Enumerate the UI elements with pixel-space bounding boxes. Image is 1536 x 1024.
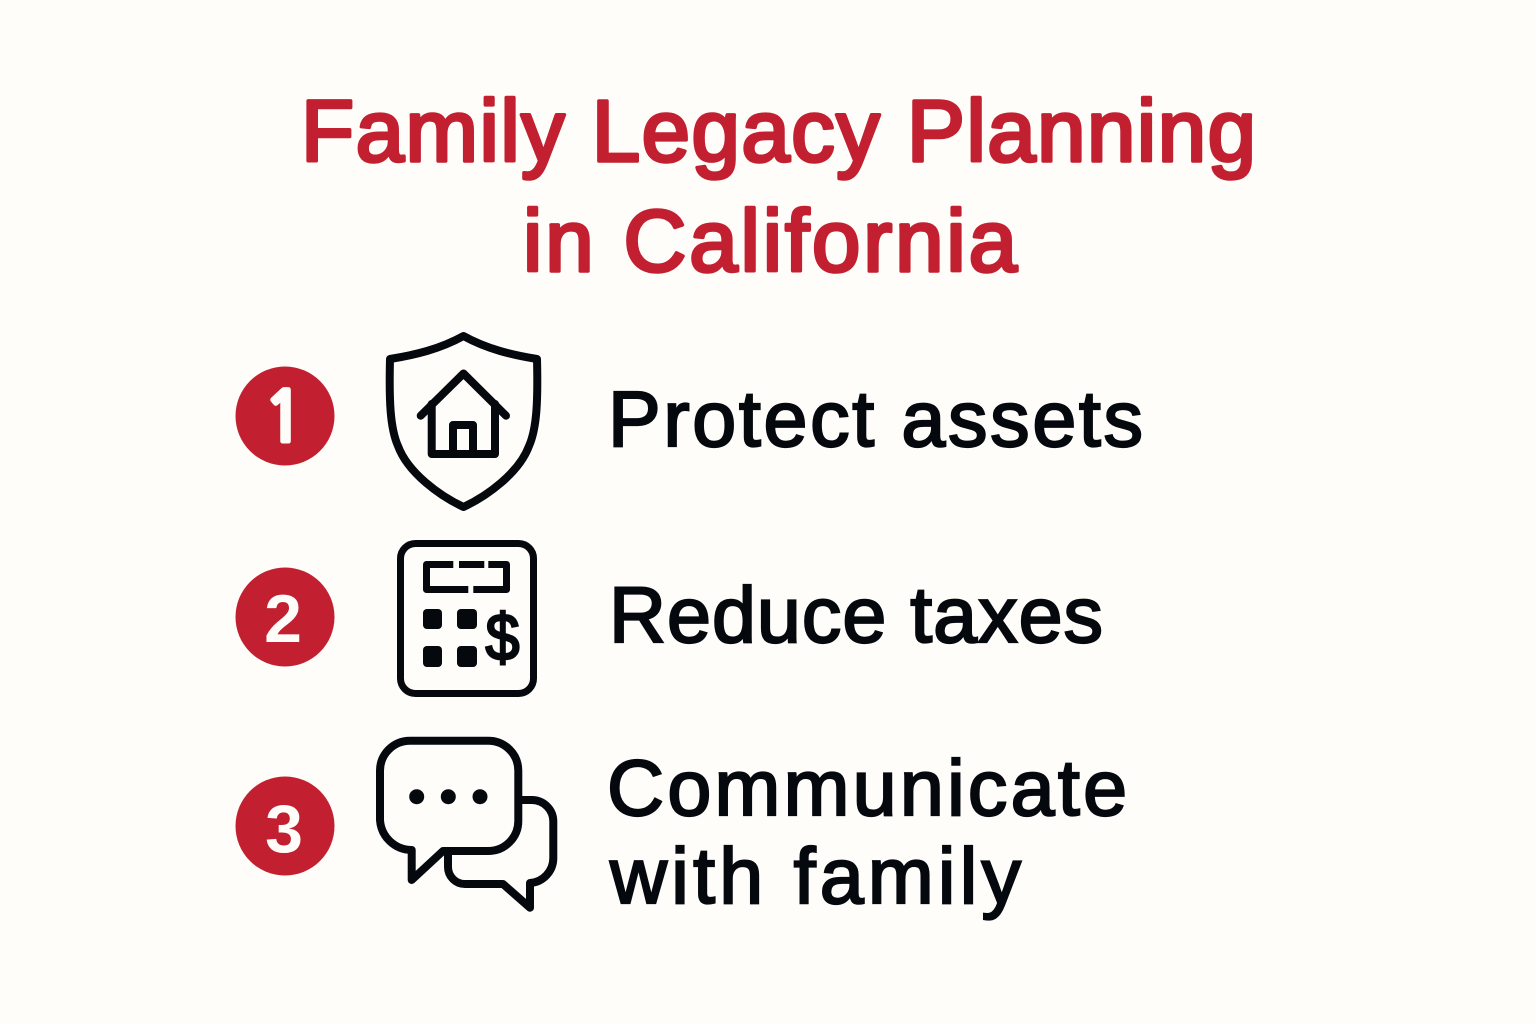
step 3 label: with family <box>609 831 1022 920</box>
step 1 badge: 1 <box>263 384 305 453</box>
title: Family Legacy Planning <box>301 83 1256 180</box>
step 2 badge: 2 <box>264 581 302 657</box>
title <box>301 83 1256 290</box>
step 1 label: Protect assets <box>608 374 1143 463</box>
step 3 label: Communicate <box>607 743 1127 832</box>
step 2 badge <box>236 568 334 666</box>
step 3 badge <box>236 776 334 876</box>
icon: shield with house <box>390 336 537 507</box>
step 1 badge <box>236 366 334 466</box>
icon: speech bubbles <box>380 741 553 908</box>
icon: calculator with dollar sign: $ <box>486 600 520 674</box>
step 2 label: Reduce taxes <box>609 570 1103 659</box>
title: in California <box>523 193 1018 290</box>
step 3 badge: 3 <box>265 791 303 867</box>
icon: calculator with dollar sign <box>400 544 534 694</box>
step 3 label <box>607 743 1127 920</box>
